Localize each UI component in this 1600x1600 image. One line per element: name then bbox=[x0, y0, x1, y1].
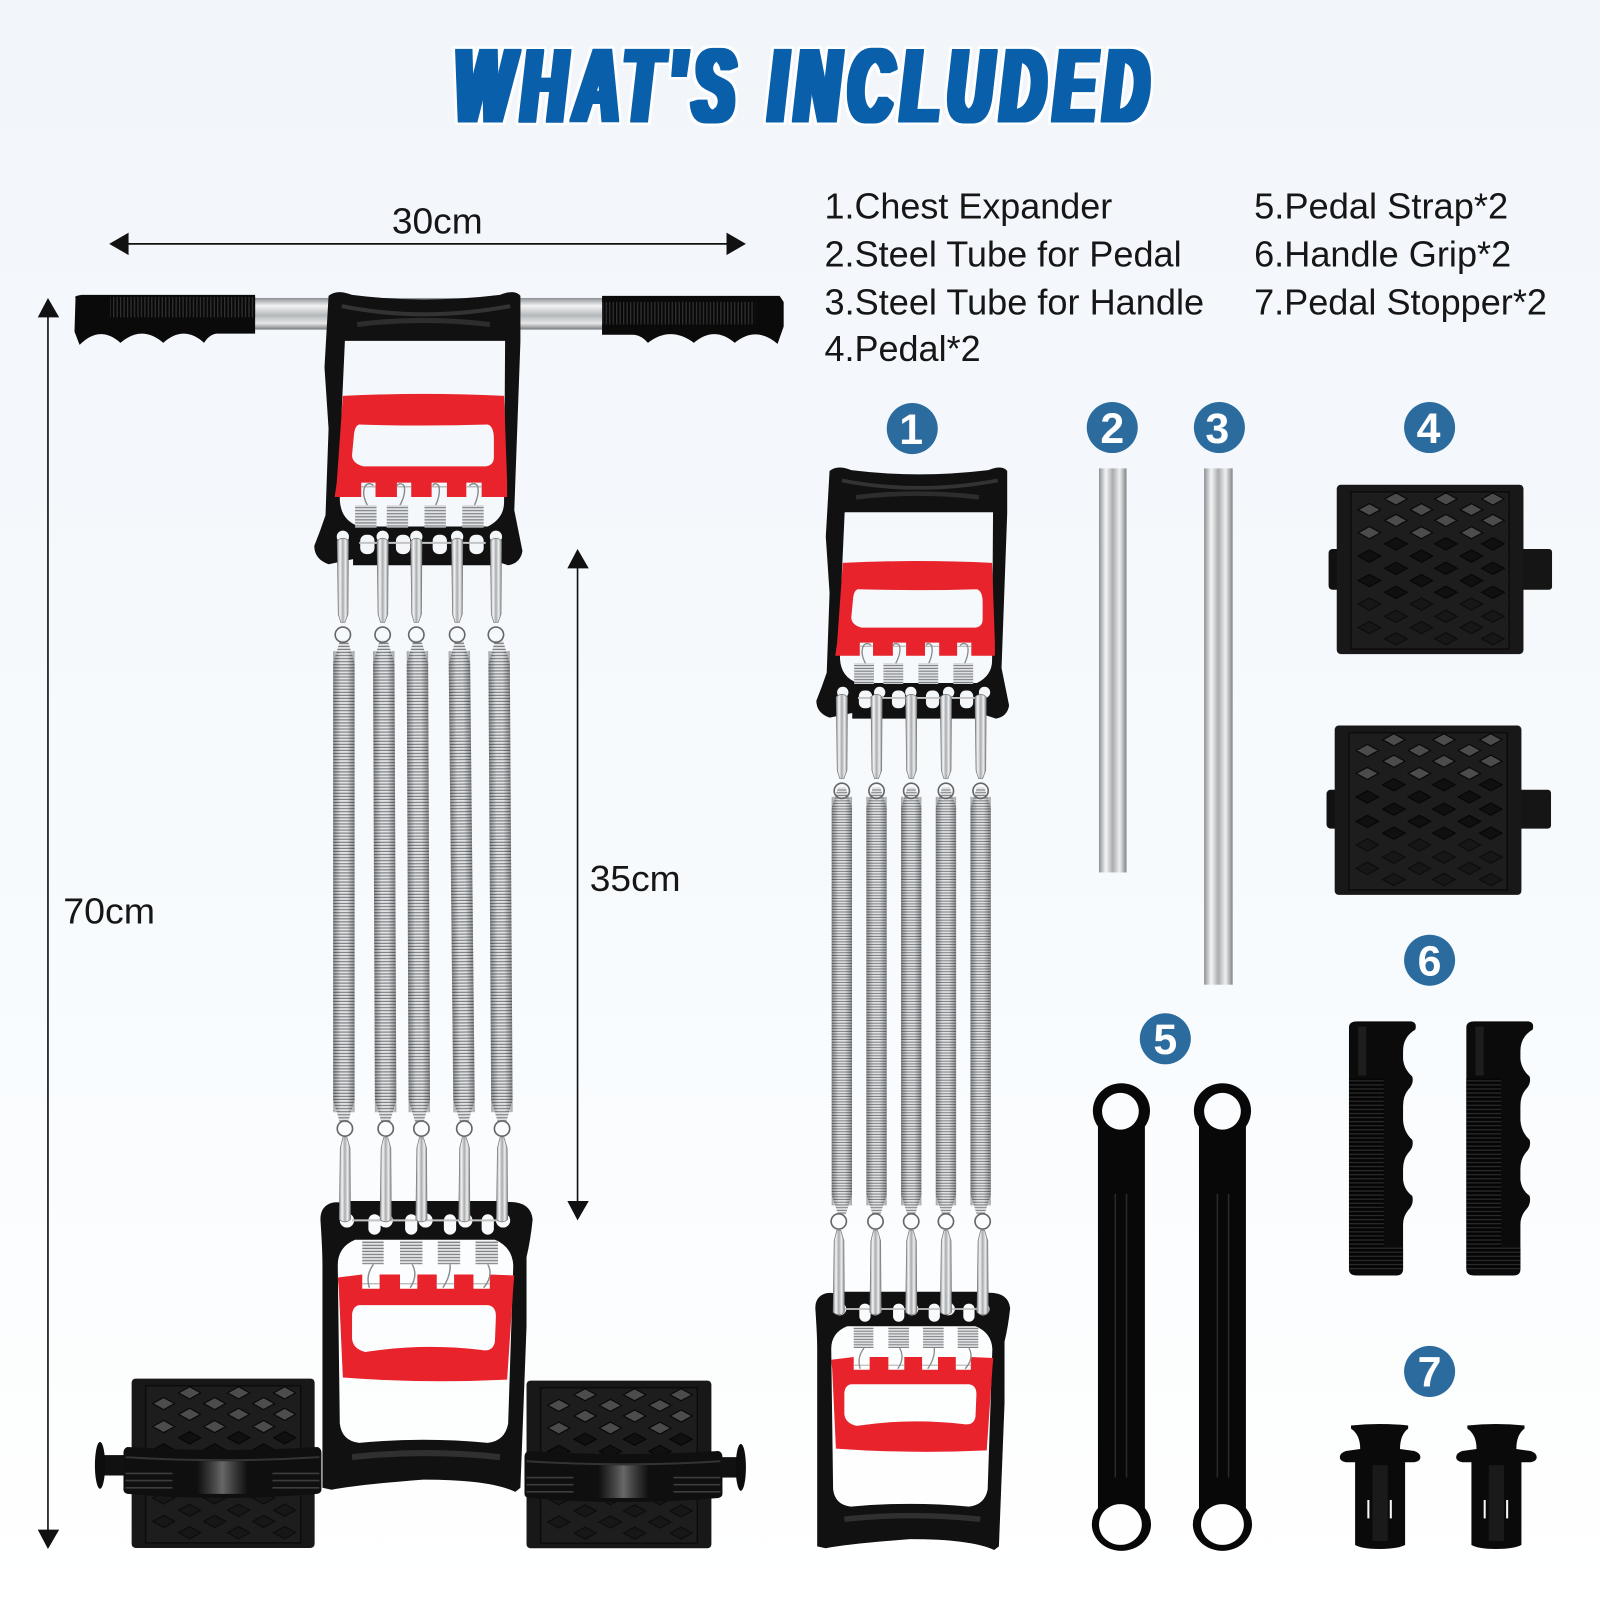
badge 4: 4 bbox=[1417, 405, 1441, 453]
long springs bbox=[333, 641, 513, 1123]
left handle grip bbox=[74, 295, 255, 345]
part 6: handle grip right bbox=[1466, 1021, 1533, 1276]
list item 6: 6.Handle Grip*2 bbox=[1254, 234, 1511, 274]
badge 4 bbox=[1404, 402, 1455, 453]
side bottom frame bbox=[815, 1292, 1010, 1550]
upper hooks bbox=[335, 538, 504, 642]
part 5: pedal strap right bbox=[1193, 1083, 1252, 1551]
left pedal strap bbox=[95, 1442, 321, 1498]
bottom frame with red handle bbox=[320, 1201, 533, 1492]
part 6: handle grip left bbox=[1349, 1021, 1416, 1276]
left pedal bbox=[132, 1379, 315, 1548]
part 4: pedal top bbox=[1329, 485, 1552, 654]
list item 4: 4.Pedal*2 bbox=[824, 329, 981, 369]
badge 2: 2 bbox=[1100, 405, 1124, 453]
badge 3 bbox=[1194, 402, 1245, 453]
badge 1: 1 bbox=[899, 406, 923, 454]
part 3: steel tube for handle bbox=[1204, 468, 1233, 985]
right handle grip bbox=[602, 296, 784, 344]
badge 5: 5 bbox=[1153, 1016, 1177, 1064]
list item 5: 5.Pedal Strap*2 bbox=[1254, 186, 1508, 226]
list item 2: 2.Steel Tube for Pedal bbox=[824, 234, 1182, 274]
list item 1: 1.Chest Expander bbox=[824, 186, 1112, 226]
badge 1 bbox=[887, 403, 938, 454]
steel handle bar bbox=[250, 298, 607, 330]
dimension: 35cm spring length: 35cm bbox=[590, 859, 681, 899]
dimension: 30cm width bbox=[109, 202, 746, 255]
list item 3: 3.Steel Tube for Handle bbox=[824, 282, 1204, 322]
badge 3: 3 bbox=[1205, 405, 1229, 453]
lower hooks bbox=[337, 1121, 510, 1222]
side top frame bbox=[816, 467, 1009, 719]
side springs bbox=[832, 788, 991, 1214]
part 4: pedal bottom bbox=[1327, 726, 1551, 895]
part 2: steel tube for pedal bbox=[1099, 468, 1127, 872]
part 7: pedal stopper right bbox=[1456, 1424, 1537, 1549]
dimension: 30cm width: 30cm bbox=[392, 202, 483, 242]
badge 2 bbox=[1087, 402, 1138, 453]
right pedal bbox=[527, 1381, 711, 1548]
badge 5 bbox=[1140, 1013, 1191, 1064]
badge 7 bbox=[1404, 1346, 1455, 1397]
badge 7: 7 bbox=[1418, 1349, 1442, 1397]
part 5: pedal strap left bbox=[1092, 1083, 1151, 1551]
part 1: chest expander bbox=[815, 467, 1010, 1550]
right pedal strap bbox=[524, 1444, 746, 1502]
dimension: 70cm height bbox=[38, 298, 155, 1549]
part 7: pedal stopper left bbox=[1340, 1424, 1420, 1549]
list item 7: 7.Pedal Stopper*2 bbox=[1254, 282, 1547, 322]
assembled chest expander bbox=[74, 292, 784, 1548]
dimension: 35cm spring length bbox=[567, 549, 681, 1220]
dimension: 70cm height: 70cm bbox=[63, 891, 155, 931]
parts list bbox=[824, 186, 1547, 369]
top frame with red handle bbox=[314, 292, 522, 565]
badge 6 bbox=[1404, 935, 1455, 986]
badge 6: 6 bbox=[1418, 938, 1442, 986]
side hooks bbox=[831, 694, 990, 1315]
